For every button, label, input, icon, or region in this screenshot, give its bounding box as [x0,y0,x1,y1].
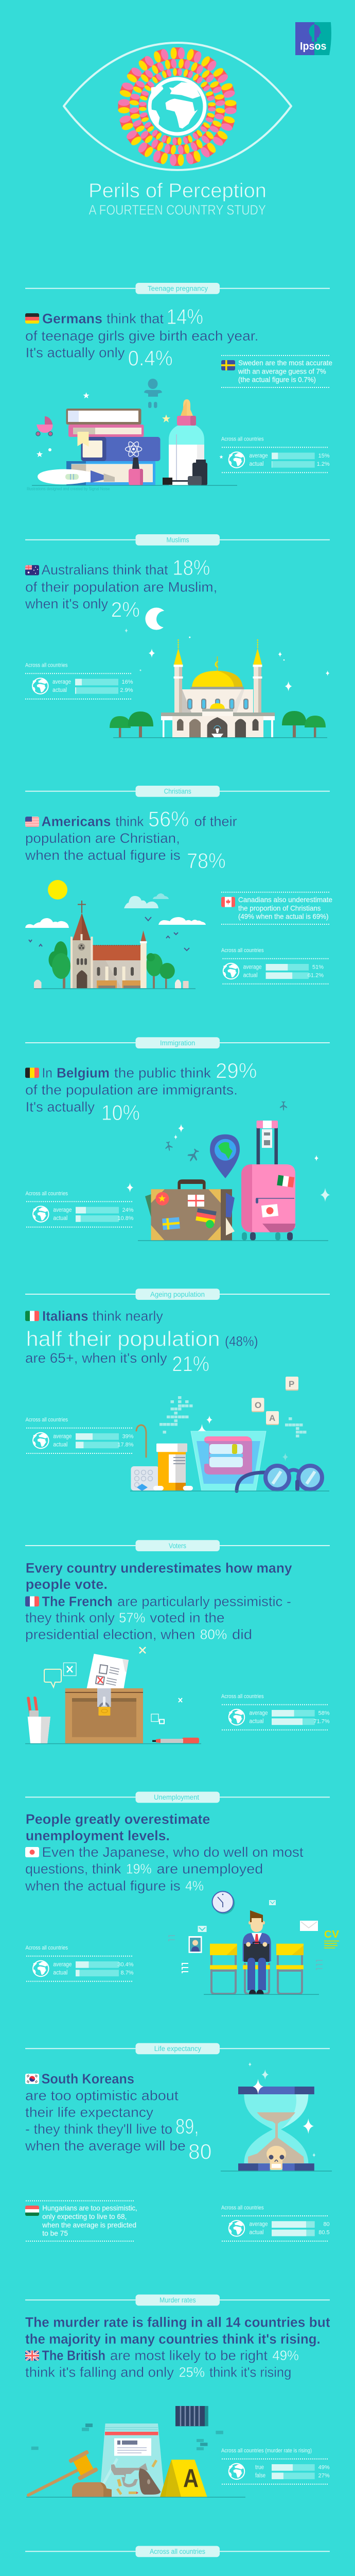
illustration: ballot box [25,1647,201,1743]
heading: Across all countries: Across all countries [150,2548,205,2555]
text block: Germans: 0.4% [128,346,173,370]
text block: French voters: they think only [25,1610,115,1625]
text block: The British: think it's falling and only [25,2365,174,2380]
callout: Sweden [221,355,332,387]
heading: Christians: Christians [164,787,191,795]
chart: ageing across all countries: 39% [122,1433,134,1439]
icon: pram [36,416,52,436]
icon: pill bottle [153,1444,193,1490]
sparkles [125,629,330,691]
chart: voters across all countries: 71.7% [313,1718,330,1724]
icon: books [66,409,161,485]
text block: Italians: half their population [26,1327,220,1351]
text block: Americans: when the actual figure is [25,848,181,863]
text block: The British: 49% [272,2348,299,2363]
text block: Germans: of teenage girls give birth each year. [25,328,258,344]
illustration: luggage [127,1101,330,1241]
chart: unemployment across all countries: 8.7% [121,1970,134,1976]
eye outline [64,43,291,170]
floating marks [44,1647,182,1724]
upper hall [182,689,253,713]
text block: French voters [25,1561,292,1642]
sparkles [197,1415,288,1461]
chart: immigration across all countries: actual [53,1215,67,1222]
chart: voters across all countries: 58% [318,1710,330,1716]
scrabble tiles: P [289,1379,294,1389]
callout: Canada: the proportion of Christians [238,904,321,912]
church building [70,901,147,988]
illustration: dentures, pills and glasses [130,1377,329,1491]
chart: unemployment across all countries: Across all countries [26,1945,68,1951]
chart: Muslims across all countries [25,663,133,699]
panel: header [64,22,331,218]
chart: teenage pregnancy across all countries: actual [249,461,263,467]
text block: Belgium: 10% [101,1100,140,1125]
icon: prison window [175,2406,208,2426]
chart: murder rates across all countries [221,2448,330,2484]
heading: Immigration [25,1037,330,1048]
text block: South Koreans: their life expectancy [25,2105,154,2120]
chart: teenage pregnancy across all countries: 1.2% [317,461,330,467]
icon: man in suit [243,1910,271,1994]
chart: voters across all countries: average [249,1710,268,1716]
heading: teenage pregnancy [25,283,330,294]
text block: Americans: population are Christian, [25,831,180,846]
text block: Italians: are 65+, when it's only [25,1350,167,1366]
text block: South Koreans: when the average will be [25,2138,186,2154]
chart: voters across all countries: actual [249,1718,263,1724]
icon: baby silhouette [144,379,162,408]
text block: South Koreans: South Koreans [41,2071,134,2087]
text block: French voters: 80% [200,1627,227,1642]
text block: Japanese [25,1811,304,1893]
credit line: Illustrations designed and created by Signal Noise [27,486,110,492]
text block: Australians [25,555,217,621]
heading: Ageing population: Ageing population [150,1291,205,1298]
icon: left chair [210,1944,237,1994]
icon: crescent moon [145,607,173,631]
chart: immigration across all countries: 24% [122,1207,134,1213]
chart: Muslims across all countries: 16% [121,679,133,685]
chart: ageing across all countries: actual [53,1442,67,1448]
chart: murder rates across all countries: 27% [318,2472,330,2479]
text block: The British: are most likely to be right [110,2348,268,2363]
heading: Voters [25,1540,330,1551]
chart: murder rates across all countries: false [255,2472,265,2479]
text block: Australians: 18% [172,555,210,580]
panel: Muslims [25,534,330,738]
clouds [25,893,206,928]
chart: immigration across all countries: Across all countries [26,1191,68,1197]
chart: teenage pregnancy across all countries [221,436,330,472]
chart: unemployment across all countries [26,1945,134,1981]
chart: life expectancy across all countries [221,2205,330,2241]
icon: nail polish [129,457,143,485]
icon: skull [267,2146,286,2170]
chart: murder rates across all countries: true [255,2464,264,2470]
dome [190,656,244,689]
chart: Christians across all countries: 61.2% [308,972,324,978]
text block: Japanese: are unemployed [156,1861,263,1877]
panel: murder rates [25,2295,330,2497]
gravestones [34,979,189,989]
text block: French voters: did [232,1627,252,1642]
text block: Americans [25,807,237,873]
text block: Australians: 2% [111,597,140,621]
icon: evidence bag [100,2424,165,2497]
icon: glasses [237,1466,322,1491]
text block: Germans: 14% [167,304,203,329]
chart: teenage pregnancy across all countries: average [249,453,268,459]
icon: marker [152,1738,199,1743]
heading: Murder rates: Murder rates [159,2296,196,2304]
text block: Australians: Australians think that [41,562,168,578]
caps [238,2087,314,2171]
trees [48,941,175,989]
callout: Hungary: Hungarians are too pessimistic, [42,2204,137,2212]
chart: life expectancy across all countries: average [249,2222,268,2228]
callout: Sweden: (the actual figure is 0.7%) [238,376,316,384]
chart: ageing across all countries: 17.8% [117,1442,134,1448]
text block: French voters: Every country underestimates how many [26,1561,292,1576]
heading: Immigration: Immigration [160,1039,195,1047]
chart: Muslims across all countries: Across all countries [25,663,68,669]
text block: Americans: of their [194,814,237,829]
text block: The British: the majority in many countries think it's rising. [25,2331,321,2347]
icon: mascara [163,460,207,485]
heading: Muslims: Muslims [167,536,189,544]
text block: French voters: voted in the [150,1610,224,1625]
heading: Life expectancy [25,2043,330,2054]
glass [244,2094,308,2163]
panel: teenage pregnancy [25,283,332,492]
panel: unemployment [25,1792,340,1994]
chart: murder rates across all countries: Across all countries (murder rate is rising) [221,2448,312,2454]
planes and sparkles [127,1101,330,1202]
text block: Italians [25,1308,258,1376]
panel: across all countries [25,2546,331,2576]
text block: The British: think it's rising [209,2365,291,2380]
sand [248,2112,304,2163]
text block: The British: The murder rate is falling in all 14 countries but [25,2315,330,2330]
callout: Hungary: when the average is predicted [42,2221,136,2229]
illustration: evidence [26,2406,245,2497]
chart: unemployment across all countries: 30.4% [117,1961,134,1968]
text block: Italians: think nearly [93,1308,163,1324]
icon: evidence marker: A [183,2464,199,2493]
text block: The British: The British [42,2348,105,2363]
illustration: hourglass [221,2062,332,2171]
chart: Muslims across all countries: actual [52,687,67,693]
heading: Across all countries [25,2546,330,2557]
scrabble tiles [252,1377,298,1425]
iris rings [118,47,237,166]
callout: Canada: (49% when the actual is 69%) [238,912,328,920]
chart: immigration across all countries: 10.8% [117,1215,134,1222]
heading: teenage pregnancy: Teenage pregnancy [148,284,208,293]
text block: Americans: 56% [148,807,189,831]
icon: ballot paper [86,1654,129,1690]
chart: voters across all countries [221,1693,330,1730]
scrabble tiles: O [255,1400,261,1410]
callout: Hungary: only expecting to live to 68, [42,2212,127,2221]
bricks [31,2424,223,2450]
text block: Germans: think that [106,311,164,327]
sparkles [248,2062,315,2158]
icon: sun [48,880,67,900]
text block: Belgium [25,1058,257,1125]
icon: baby bottle [169,399,204,485]
chart: Christians across all countries: actual [243,972,258,978]
text block: South Koreans: 80 [188,2139,211,2163]
chart: ageing across all countries: Across all countries [26,1417,68,1423]
palm trees [110,711,326,738]
panel: ageing population [25,1289,330,1491]
text block: South Koreans [25,2071,211,2163]
icon: pencil cup [27,1697,50,1743]
text block: French voters: presidential election, when [25,1627,195,1642]
callout: Hungary [25,2201,137,2241]
text block: Belgium: of the population are immigrants. [25,1082,238,1097]
panel: voters [25,1540,330,1743]
text block: Germans: It's actually only [26,345,125,360]
illustration: books, bottle and test [27,379,237,492]
chart: teenage pregnancy across all countries: 15% [318,453,330,459]
text block: Australians: when it's only [25,596,108,612]
heading: Christians [25,786,330,797]
text block: Japanese: 19% [126,1861,152,1877]
chart: life expectancy across all countries: actual [249,2230,263,2236]
text block: Japanese: Even the Japanese, who do well on most [42,1844,304,1860]
chart: ageing across all countries [26,1417,134,1453]
text block: Japanese: 4% [185,1878,204,1893]
heading: Unemployment [25,1792,330,1803]
lower hall [161,711,275,737]
chart: life expectancy across all countries: 80.5 [318,2230,330,2236]
chart: voters across all countries: Across all countries [221,1693,264,1700]
icon: evidence marker [160,2460,207,2497]
left minaret [174,639,183,713]
heading: Ageing population [25,1289,330,1300]
text block: The British: 25% [179,2365,205,2380]
icons: envelopes, photo, CV [169,1900,340,1973]
chart: ageing across all countries: average [53,1433,72,1439]
chart: Muslims across all countries: 2.9% [120,687,133,693]
illustration: mosque [110,639,327,738]
icon: pink suitcase [241,1121,295,1241]
panel: Christians [25,786,332,989]
text block: French voters: people vote. [26,1577,108,1592]
icon: ballot box [65,1688,143,1743]
chart: teenage pregnancy across all countries: Across all countries [221,436,264,443]
scrabble tiles: A [269,1413,275,1423]
text block: Belgium: 29% [216,1058,257,1082]
text block: Belgium: the public think [114,1065,211,1081]
text block: Americans: Americans [41,814,111,829]
panel: immigration [25,1037,330,1241]
text block: Belgium: In [42,1065,52,1081]
callout: Canada: Canadians also underestimate [238,895,332,904]
text block: Japanese: when the actual figure is [25,1878,181,1893]
Ipsos logo: Ipsos [300,41,326,53]
text block: The British [25,2315,330,2380]
chart: murder rates across all countries: 49% [318,2464,330,2470]
text block: French voters: The French [42,1594,113,1609]
illustration: church [25,880,206,989]
text block: Italians: Italians [42,1308,88,1324]
icon: right chair [276,1944,304,1994]
illustration: job candidate [169,1891,340,1994]
icon: gavel [28,2450,112,2497]
birds [29,917,189,951]
icon: map pin [210,1134,240,1178]
chart: life expectancy across all countries: Across all countries [221,2205,264,2211]
text block: Japanese: questions, think [25,1861,121,1877]
heading: Murder rates [25,2295,330,2306]
chart: Christians across all countries: Across all countries [221,947,264,954]
chart: life expectancy across all countries: 80 [323,2222,330,2228]
icon: glass with dentures [191,1431,266,1491]
text block: Japanese: People greatly overestimate [26,1811,210,1827]
callout: Canada [221,892,332,924]
icon: blister pack [131,1466,159,1491]
right minaret [253,639,262,713]
text block: South Koreans: are too optimistic about [25,2088,179,2104]
text block: Australians: of their population are Muslim, [25,579,217,595]
heading: Unemployment: Unemployment [154,1793,199,1801]
text block: French voters: 57% [119,1610,145,1625]
text block: Americans: 78% [187,849,226,873]
text block: Italians: (48%) [225,1334,258,1349]
icon: walking cane [136,1425,146,1457]
chart: unemployment across all countries: average [53,1961,72,1968]
title: Perils of Perception [88,180,267,202]
text block: Belgium: Belgium [57,1065,110,1081]
text block: Italians: 21% [172,1352,209,1376]
chart: immigration across all countries: average [53,1207,72,1213]
icons: envelopes, photo, CV: CV [324,1929,340,1940]
text block: South Koreans: - they think they'll live to [25,2122,172,2137]
chart: Christians across all countries: 51% [312,964,324,970]
icon: clock [212,1891,235,1914]
chart: immigration across all countries [26,1191,134,1227]
panel: life expectancy [25,2043,332,2241]
crossword pixels [159,1396,307,1437]
callout: Sweden: Sweden are the most accurate [238,359,332,367]
icon: pregnancy test [38,469,115,484]
text block: French voters: are particularly pessimistic - [117,1594,291,1609]
text block: South Koreans: 89, [175,2114,199,2139]
subtitle: A FOURTEEN COUNTRY STUDY [88,202,266,218]
heading: Life expectancy: Life expectancy [154,2045,201,2053]
heading: Voters: Voters [169,1542,186,1550]
text block: Germans [25,304,258,370]
callout: Sweden: with an average guess of 7% [238,367,326,375]
Ipsos logo [295,22,331,55]
chart: Muslims across all countries: average [52,679,71,685]
chart: unemployment across all countries: actual [53,1970,67,1976]
chart: Christians across all countries [221,947,329,984]
text block: Germans: Germans [42,311,102,327]
icon: globe pupil [148,77,207,136]
text block: Americans: think [115,814,144,829]
text block: Japanese: unemployment levels. [26,1828,170,1843]
heading: Muslims [25,534,330,546]
icon: brown suitcase [145,1179,235,1241]
chart: Christians across all countries: average [243,964,262,970]
callout: Hungary: to be 75 [42,2229,68,2237]
text block: Belgium: It's actually [26,1099,95,1114]
